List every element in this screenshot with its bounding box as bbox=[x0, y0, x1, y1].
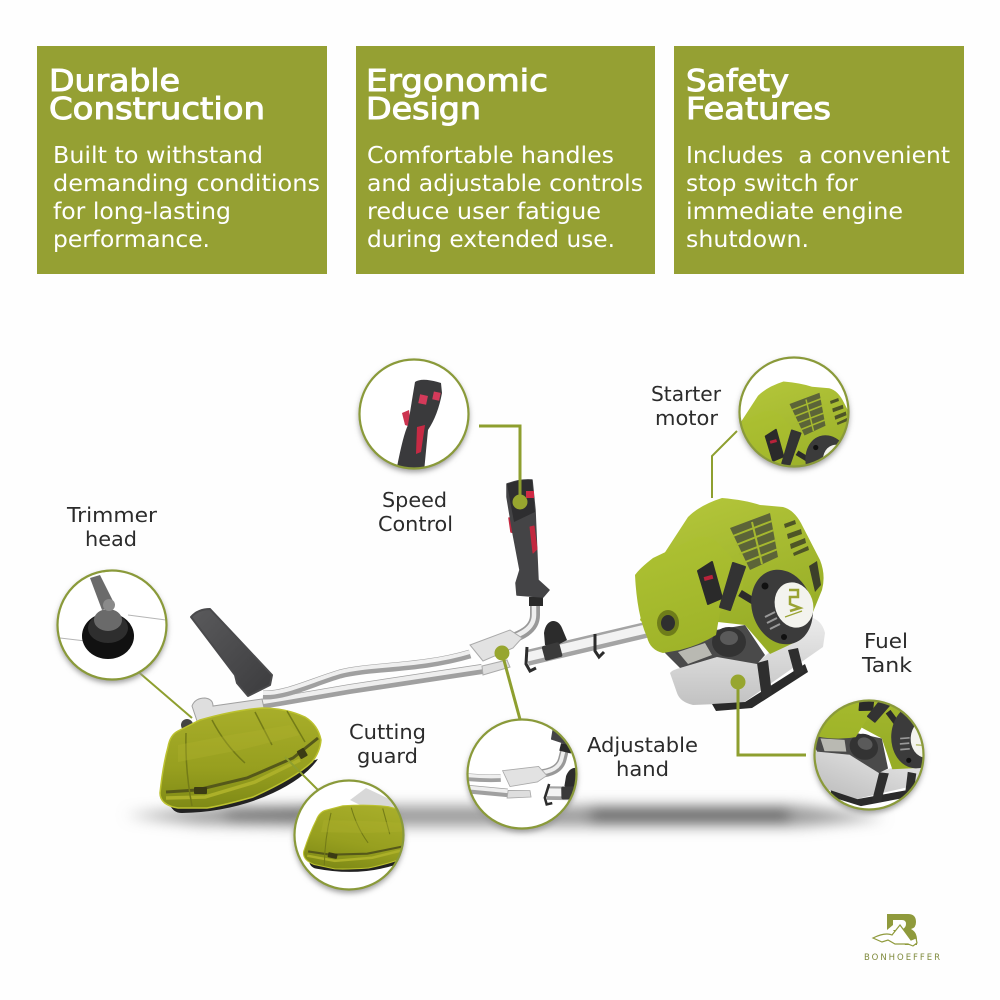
label: adjustable hand: Adjustable bbox=[587, 733, 698, 757]
body text: ergonomic design: reduce user fatigue bbox=[367, 199, 601, 225]
label: adjustable hand: hand bbox=[616, 757, 669, 781]
body text: safety features: immediate engine bbox=[686, 199, 903, 225]
label: fuel tank bbox=[861, 629, 912, 677]
label: trimmer head: Trimmer bbox=[66, 503, 158, 527]
body text: ergonomic design bbox=[367, 143, 643, 253]
label: fuel tank: Tank bbox=[861, 653, 912, 677]
panel: ergonomic design bbox=[356, 46, 655, 274]
body text: safety features: stop switch for bbox=[686, 171, 859, 197]
heading: durable construction: Durable bbox=[49, 64, 180, 99]
callout circle: starter motor bbox=[735, 356, 853, 474]
label: speed control: Speed bbox=[382, 488, 447, 512]
label: trimmer head: head bbox=[85, 527, 137, 551]
gear head bbox=[181, 698, 264, 731]
body text: safety features bbox=[686, 143, 950, 253]
panel: safety features bbox=[674, 46, 964, 274]
panel: durable construction bbox=[37, 46, 327, 274]
body text: durable construction: Built to withstand bbox=[53, 143, 263, 169]
speed control handle bbox=[507, 480, 549, 606]
engine bbox=[635, 498, 825, 711]
body text: safety features: Includes a convenient bbox=[686, 143, 950, 169]
body text: durable construction: performance. bbox=[53, 227, 210, 253]
label: cutting guard: Cutting bbox=[349, 720, 426, 744]
ground shadow bbox=[125, 806, 885, 826]
heading: safety features bbox=[686, 64, 831, 127]
cutting guard bbox=[160, 708, 321, 813]
body text: durable construction bbox=[53, 143, 320, 253]
heading: safety features: Features bbox=[686, 92, 831, 127]
heading: durable construction: Construction bbox=[49, 92, 265, 127]
leader: cutting guard bbox=[285, 757, 318, 790]
trimmer: brush cutter assembly bbox=[160, 480, 825, 813]
label: trimmer head bbox=[66, 503, 158, 551]
body text: safety features: shutdown. bbox=[686, 227, 809, 253]
logo: bonhoeffer: BONHOEFFER bbox=[864, 953, 940, 963]
logo: bonhoeffer bbox=[864, 914, 940, 963]
shaft and handlebars bbox=[205, 600, 650, 713]
heading: ergonomic design: Design bbox=[366, 92, 481, 127]
label: speed control bbox=[378, 488, 453, 536]
body text: durable construction: for long-lasting bbox=[53, 199, 231, 225]
heading: ergonomic design: Ergonomic bbox=[366, 64, 548, 99]
label: starter motor: Starter bbox=[651, 382, 722, 406]
body text: ergonomic design: and adjustable controls bbox=[367, 171, 643, 197]
callout circle: adjustable hand bbox=[463, 718, 581, 836]
callout circle: speed control bbox=[359, 359, 469, 472]
callout circle: trimmer head bbox=[57, 560, 167, 683]
leader: adjustable hand bbox=[494, 646, 521, 723]
heading: durable construction bbox=[49, 64, 265, 127]
label: speed control: Control bbox=[378, 512, 453, 536]
label: adjustable hand bbox=[587, 733, 698, 781]
heading: safety features: Safety bbox=[686, 64, 789, 99]
rear grip bbox=[191, 609, 272, 696]
leader: starter motor bbox=[712, 431, 737, 498]
label: cutting guard: guard bbox=[357, 744, 418, 768]
body text: ergonomic design: Comfortable handles bbox=[367, 143, 614, 169]
leader: fuel tank bbox=[730, 674, 806, 755]
callout circle: cutting guard bbox=[294, 780, 430, 893]
body text: ergonomic design: during extended use. bbox=[367, 227, 615, 253]
body text: durable construction: demanding conditions bbox=[53, 171, 320, 197]
label: fuel tank: Fuel bbox=[864, 629, 908, 653]
heading: ergonomic design bbox=[366, 64, 548, 127]
leader: speed control bbox=[479, 426, 528, 510]
label: starter motor: motor bbox=[655, 406, 719, 430]
callout circle: fuel tank bbox=[810, 699, 928, 816]
label: cutting guard bbox=[349, 720, 426, 768]
label: starter motor bbox=[651, 382, 722, 430]
leader: trimmer head bbox=[128, 663, 192, 718]
